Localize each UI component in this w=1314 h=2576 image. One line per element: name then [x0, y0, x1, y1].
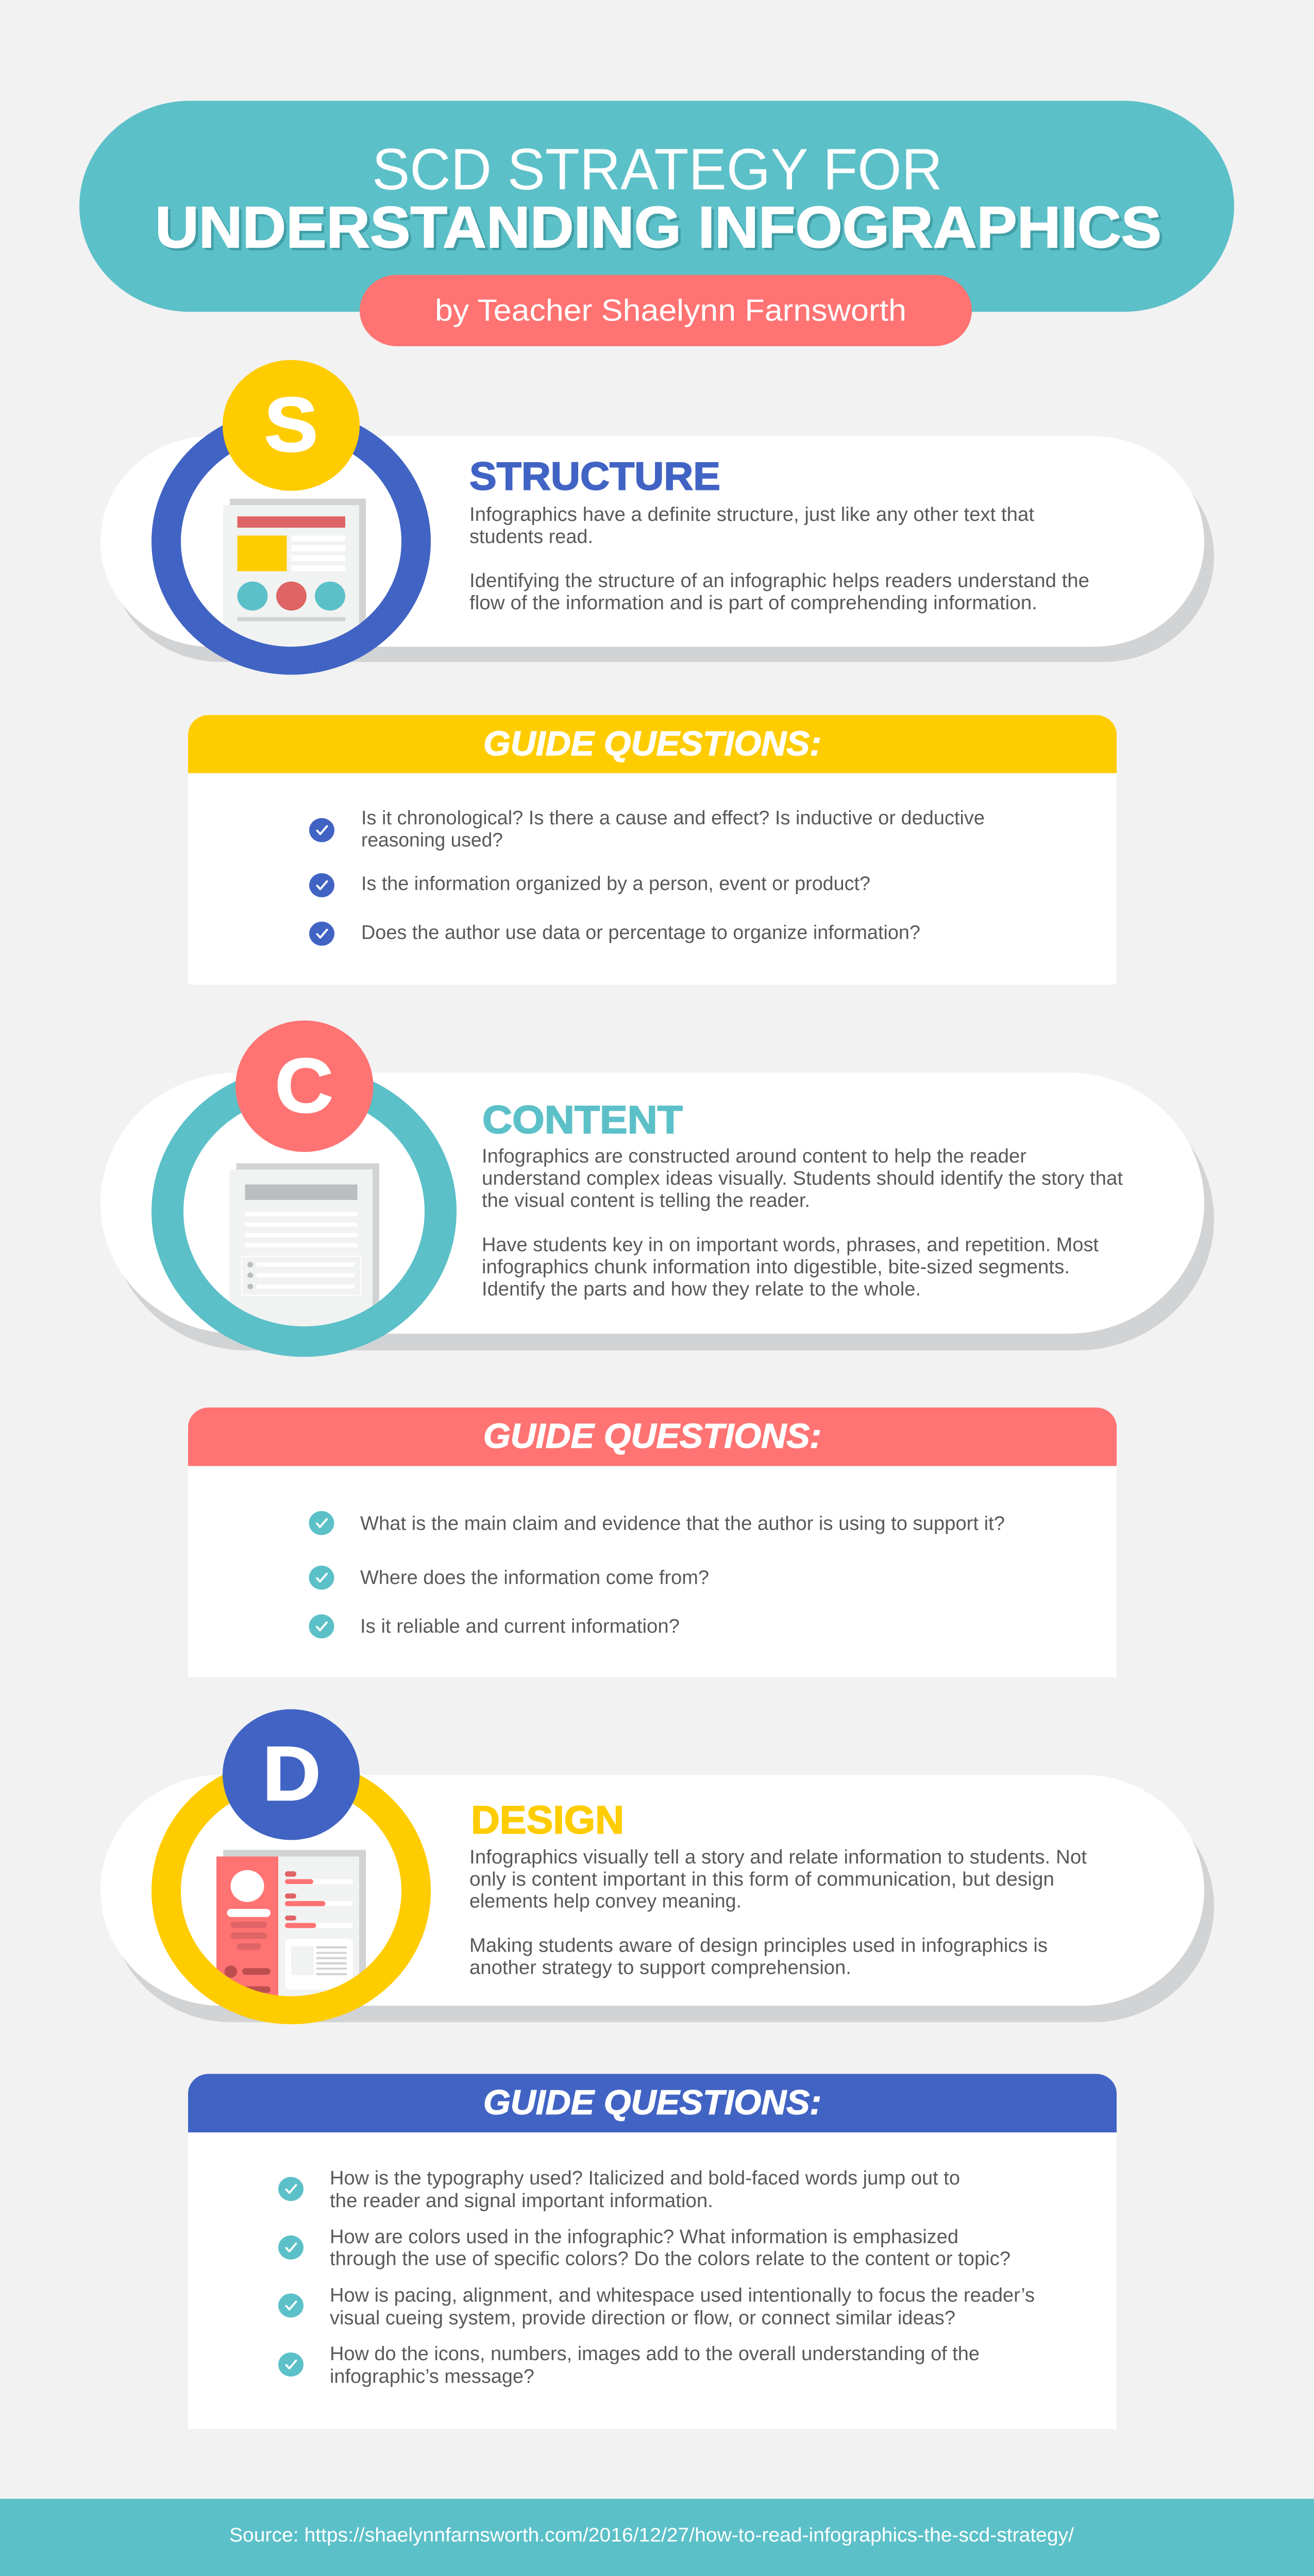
footer source bar: Source: https://shaelynnfarnsworth.com/2016/12/27/how-to-read-infographics-the-scd-strategy/	[229, 2524, 1074, 2546]
panel: structure	[100, 360, 1214, 677]
guide header 2: GUIDE QUESTIONS:	[483, 1417, 821, 1455]
icon: letter C badge	[235, 1021, 373, 1152]
footer source bar	[0, 2499, 1314, 2576]
text: content body: Identify the parts and how they relate to the whole.	[482, 1278, 921, 1300]
author pill: by Teacher Shaelynn Farnsworth	[435, 293, 906, 327]
icon: content ring	[167, 1081, 441, 1342]
icon: letter S badge	[223, 360, 360, 491]
title: SCD STRATEGY FOR	[372, 137, 942, 202]
panel: design	[100, 1709, 1214, 2029]
checklist 3: infographic’s message?	[330, 2366, 534, 2387]
title: UNDERSTANDING INFOGRAPHICS	[155, 195, 1161, 260]
panel: guide questions 2	[188, 1408, 1117, 1677]
checklist 3: How is the typography used? Italicized and bold-faced words jump out to	[330, 2167, 960, 2189]
text: content body: infographics chunk information into digestible, bite-sized segments.	[482, 1256, 1070, 1278]
icon: letter D badge: D	[263, 1731, 321, 1817]
text: design body: Making students aware of design principles used in infographics is	[469, 1935, 1048, 1956]
icon: structure document	[223, 499, 366, 647]
author pill	[360, 275, 972, 346]
checklist 3	[278, 2167, 1035, 2387]
text: design body: another strategy to support comprehension.	[469, 1957, 851, 1978]
icon: design ring	[166, 1772, 416, 2010]
text: content body: Infographics are constructed around content to help the reader	[482, 1145, 1026, 1167]
icon: design document	[216, 1850, 366, 1996]
text: design body: Infographics visually tell a story and relate information to students. Not	[469, 1846, 1087, 1868]
guide header 3: GUIDE QUESTIONS:	[483, 2083, 821, 2122]
checklist 3: How are colors used in the infographic? What information is emphasized	[330, 2226, 958, 2248]
panel: guide questions 3	[188, 2074, 1117, 2429]
guide header 1	[188, 715, 1117, 773]
icon: letter C badge: C	[275, 1043, 333, 1128]
checklist 3: How do the icons, numbers, images add to the overall understanding of the	[330, 2343, 980, 2365]
heading: content: CONTENT	[482, 1097, 683, 1142]
text: content body: understand complex ideas visually. Students should identify the story that	[482, 1167, 1123, 1189]
panel: guide questions 1	[188, 715, 1117, 985]
checklist 1: Is it chronological? Is there a cause and effect? Is inductive or deductive	[361, 807, 985, 829]
text: structure body: Identifying the structure of an infographic helps readers understand the	[469, 570, 1089, 592]
text: content body: the visual content is telling the reader.	[482, 1190, 810, 1211]
checklist 2: What is the main claim and evidence that the author is using to support it?	[360, 1513, 1005, 1534]
title	[155, 137, 1161, 260]
checklist 1: reasoning used?	[361, 829, 503, 851]
text: content body	[482, 1145, 1123, 1300]
checklist 2	[309, 1511, 1005, 1638]
guide header 2	[188, 1408, 1117, 1466]
text: design body	[469, 1846, 1087, 1978]
panel: content	[100, 1021, 1214, 1366]
checklist 1: Does the author use data or percentage to organize information?	[361, 922, 920, 943]
checklist 3: the reader and signal important information.	[330, 2190, 713, 2212]
checklist 1: Is the information organized by a person, event or product?	[361, 873, 870, 895]
text: design body: elements help convey meaning.	[469, 1891, 742, 1912]
heading: design: DESIGN	[471, 1798, 624, 1842]
heading: structure: STRUCTURE	[469, 454, 720, 498]
checklist 3: How is pacing, alignment, and whitespace used intentionally to focus the reader’s	[330, 2284, 1035, 2306]
header banner	[79, 101, 1234, 312]
checklist 2: Where does the information come from?	[360, 1567, 709, 1588]
guide header 1: GUIDE QUESTIONS:	[483, 725, 821, 763]
text: structure body: flow of the information and is part of comprehending information.	[469, 592, 1037, 614]
icon: structure ring	[166, 422, 416, 660]
text: design body: only is content important in this form of communication, but design	[469, 1869, 1054, 1890]
guide header 3	[188, 2074, 1117, 2132]
checklist 3: visual cueing system, provide direction or flow, or connect similar ideas?	[330, 2307, 955, 2329]
text: structure body	[469, 504, 1089, 614]
icon: content document	[230, 1163, 379, 1326]
icon: letter S badge: S	[264, 382, 318, 468]
checklist 3: through the use of specific colors? Do the colors relate to the content or topic?	[330, 2248, 1010, 2270]
checklist 2: Is it reliable and current information?	[360, 1616, 680, 1637]
text: structure body: Infographics have a definite structure, just like any other text that	[469, 504, 1034, 526]
text: structure body: students read.	[469, 526, 593, 548]
text: content body: Have students key in on important words, phrases, and repetition. Most	[482, 1234, 1099, 1256]
icon: letter D badge	[223, 1709, 360, 1840]
checklist 1	[309, 807, 985, 946]
